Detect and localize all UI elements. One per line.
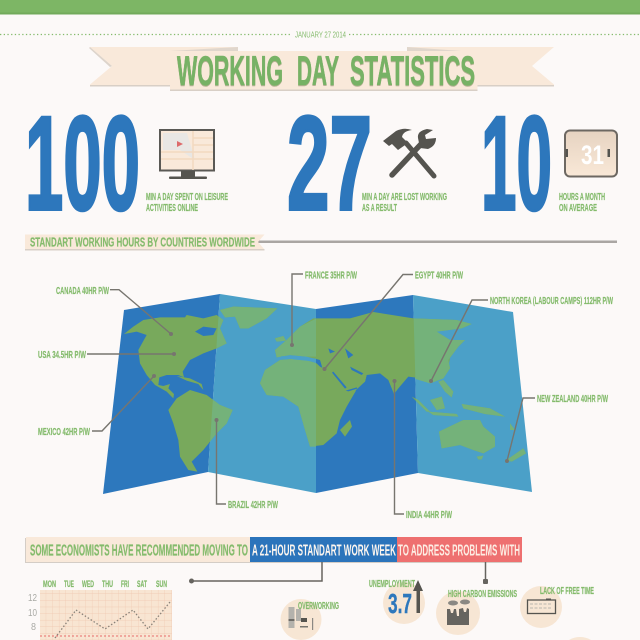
y axis labels: 8: [31, 622, 36, 633]
stat: 100: 100: [25, 90, 140, 238]
connector: red segment to problems: [483, 562, 488, 584]
continents: [124, 307, 526, 472]
problem: lack of free time: LACK OF FREE TIME: [540, 586, 594, 597]
section banner: 21-hour work week: A 21-HOUR STANDART WORK WEEK: [252, 542, 396, 560]
icon: factory: [447, 600, 470, 625]
date line: JANUARY 27 2014: [295, 30, 346, 40]
callout: Mexico: MEXICO 42HR P/W: [38, 426, 90, 438]
section banner: 21-hour work week: TO ADDRESS PROBLEMS WITH: [398, 542, 520, 560]
icon: monitor: [160, 130, 214, 179]
day labels: WED: [82, 579, 94, 590]
callout: USA: [38, 349, 176, 361]
caption: ON AVERAGE: [559, 202, 597, 214]
section heading: working hours: [25, 234, 617, 250]
problem: overworking: [280, 599, 339, 640]
title: WORKING: [177, 47, 283, 94]
icon: calendar: [565, 130, 617, 176]
callout: Canada: CANADA 40HR P/W: [56, 285, 109, 297]
day labels: [43, 579, 167, 590]
callout: Egypt: EGYPT 40HR P/W: [415, 270, 463, 282]
chart plot area: [40, 590, 172, 640]
stat: 27: 27: [287, 90, 372, 238]
callout: India: INDIA 44HR P/W: [406, 509, 452, 521]
connector: blue segment to chart: [189, 562, 322, 584]
caption: [559, 191, 605, 214]
title: STATISTICS: [350, 47, 475, 94]
caption: MIN A DAY SPENT ON LEISURE: [146, 191, 228, 203]
day labels: SUN: [156, 579, 167, 590]
day labels: THU: [102, 579, 113, 590]
line chart: [28, 579, 172, 640]
top green bar: [0, 0, 640, 14]
inland seas: [195, 327, 363, 391]
icon: schedule: [528, 598, 556, 614]
callout: New Zealand: [505, 393, 608, 463]
callout: Mexico: [38, 374, 156, 438]
y axis labels: 12: [28, 593, 37, 604]
icon: calendar: 31: [581, 140, 604, 170]
y axis labels: 10: [28, 608, 37, 619]
day labels: TUE: [64, 579, 74, 590]
section banner: 21-hour work week: [25, 537, 522, 563]
red threshold line: [40, 635, 172, 637]
caption: ACTIVITIES ONLINE: [146, 202, 198, 214]
y axis labels: [28, 593, 37, 633]
world map: [103, 294, 532, 494]
section heading: working hours: STANDART WORKING HOURS BY COUNTRIES WORDWIDE: [30, 236, 255, 250]
callout: USA: USA 34.5HR P/W: [38, 349, 86, 361]
problem: lack of free time: [520, 586, 594, 628]
section banner: 21-hour work week: SOME ECONOMISTS HAVE RECOMMENDED MOVING TO: [30, 542, 248, 560]
problem: unemployment: UNEMPLOYMENT: [369, 579, 415, 590]
day labels: MON: [43, 579, 56, 590]
callout: Brazil: BRAZIL 42HR P/W: [228, 499, 278, 511]
callout: Canada: [56, 285, 173, 336]
title: [177, 47, 475, 94]
problem: unemployment: 3.7: [388, 588, 412, 619]
caption: [362, 191, 447, 214]
title: DAY: [297, 47, 339, 94]
caption: AS A RESULT: [362, 202, 397, 214]
day labels: FRI: [121, 579, 129, 590]
map panels: [103, 294, 532, 494]
day labels: SAT: [137, 579, 147, 590]
problem: overworking: OVERWORKING: [298, 601, 339, 612]
callout: Egypt: [322, 270, 463, 371]
caption: [146, 191, 228, 214]
problem: high carbon emissions: HIGH CARBON EMISSIONS: [448, 589, 517, 600]
callout: France: FRANCE 35HR P/W: [305, 270, 357, 282]
continents on light folds: [200, 307, 526, 462]
problem: unemployment: [369, 579, 425, 624]
data line: [55, 602, 170, 638]
stat: 10: 10: [481, 90, 552, 238]
callout: North Korea: [429, 295, 613, 383]
callout: Brazil: [214, 418, 278, 511]
title ribbon: [89, 47, 554, 94]
callout: France: [290, 270, 357, 347]
problem: next circle, cropped: [569, 637, 591, 640]
icon: up arrow: [413, 580, 423, 613]
icon: hammer and wrench: [383, 129, 436, 176]
problem: high carbon emissions: [436, 589, 517, 635]
callout: India: [392, 379, 452, 521]
caption: MIN A DAY ARE LOST WORKING: [362, 191, 447, 203]
